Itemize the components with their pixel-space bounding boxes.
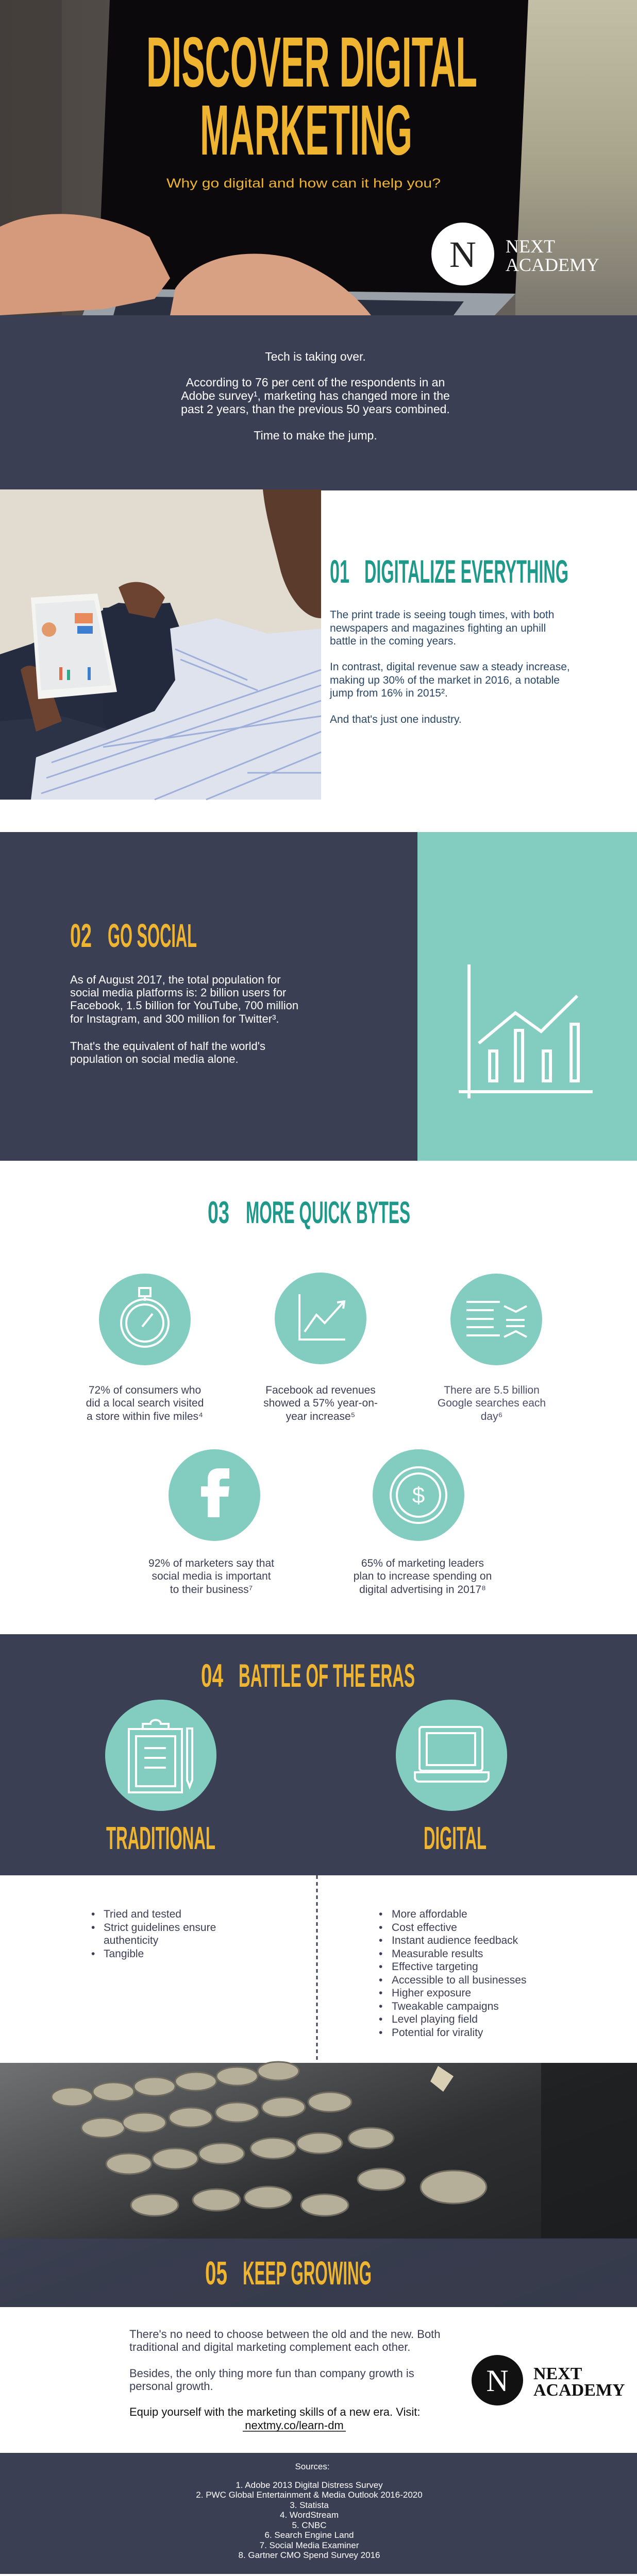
digital bullet list: • bbox=[379, 1908, 382, 1920]
heading 03: 03 bbox=[208, 1195, 229, 1230]
comparison lists bbox=[91, 1875, 526, 2063]
hero: laptop photo header bbox=[0, 0, 637, 315]
stat texts row 2 bbox=[148, 1557, 492, 1596]
traditional bullet list: • bbox=[91, 1908, 95, 1920]
digital bullet list: Effective targeting bbox=[392, 1961, 478, 1973]
stat texts row 1: Google searches each bbox=[438, 1397, 546, 1409]
logo: Next Academy (header): NEXT bbox=[506, 236, 555, 257]
body text 01: newspapers and magazines fighting an uphill bbox=[330, 622, 546, 634]
logo: Next Academy (header): ACADEMY bbox=[506, 255, 599, 275]
intro band: Tech is taking over. bbox=[265, 350, 366, 363]
digital bullet list: Tweakable campaigns bbox=[392, 2001, 499, 2012]
section 03: more quick bytes bbox=[86, 1195, 546, 1596]
digital bullet list: • bbox=[379, 2013, 382, 2025]
heading 05: keep growing: 05 bbox=[205, 2255, 227, 2292]
icon: laptop (digital) bbox=[396, 1700, 507, 1811]
intro band bbox=[0, 315, 637, 490]
heading 03 bbox=[208, 1195, 410, 1230]
body text 01: The print trade is seeing tough times, with both bbox=[330, 609, 554, 621]
digital bullet list: Cost effective bbox=[392, 1922, 457, 1934]
intro band: Adobe survey¹, marketing has changed more in the bbox=[181, 389, 450, 402]
sources footer: 6. Search Engine Land bbox=[265, 2530, 354, 2540]
stat texts row 1: There are 5.5 billion bbox=[444, 1384, 540, 1396]
body text 01 bbox=[329, 609, 570, 725]
stat texts row 2: social media is important bbox=[152, 1570, 271, 1582]
digital bullet list: • bbox=[379, 1935, 382, 1946]
digital bullet list: • bbox=[379, 1974, 382, 1986]
sources footer: Sources: bbox=[295, 2462, 330, 2471]
icon: bar chart with trend line bbox=[459, 964, 593, 1098]
label: digital: DIGITAL bbox=[424, 1821, 487, 1856]
sources footer: 2. PWC Global Entertainment & Media Outlook 2016-2020 bbox=[196, 2490, 423, 2500]
sources footer: 1. Adobe 2013 Digital Distress Survey bbox=[236, 2480, 383, 2490]
digital bullet list: Accessible to all businesses bbox=[392, 1974, 526, 1986]
digital bullet list: • bbox=[379, 1961, 382, 1973]
body text 02: for Instagram, and 300 million for Twitter³. bbox=[70, 1012, 279, 1025]
sources footer: 7. Social Media Examiner bbox=[260, 2540, 359, 2550]
traditional bullet list: Strict guidelines ensure bbox=[104, 1922, 216, 1934]
icon: clipboard (traditional) bbox=[105, 1700, 216, 1811]
section 01: digitalize everything bbox=[329, 554, 570, 725]
traditional bullet list: Tried and tested bbox=[104, 1908, 181, 1920]
digital bullet list: Potential for virality bbox=[392, 2027, 483, 2039]
closing text: nextmy.co/learn-dm bbox=[245, 2419, 344, 2432]
traditional bullet list: authenticity bbox=[104, 1935, 159, 1946]
stat texts row 1: a store within five miles⁴ bbox=[87, 1411, 203, 1422]
digital bullet list: • bbox=[379, 1922, 382, 1934]
sources footer: 5. CNBC bbox=[292, 2520, 327, 2530]
body text 01: jump from 16% in 2015². bbox=[329, 687, 448, 699]
logo: Next Academy (footer): N bbox=[486, 2364, 509, 2398]
intro band: past 2 years, than the previous 50 years combined. bbox=[181, 402, 450, 416]
sources footer: 3. Statista bbox=[290, 2500, 329, 2510]
label: traditional: TRADITIONAL bbox=[106, 1821, 215, 1856]
title: MARKETING bbox=[200, 91, 412, 170]
logo: Next Academy (header) bbox=[431, 223, 599, 285]
logo: Next Academy (footer): NEXT bbox=[533, 2364, 582, 2383]
logo: Next Academy (footer) bbox=[472, 2355, 625, 2405]
stat texts row 2: plan to increase spending on bbox=[354, 1570, 492, 1582]
heading 02 bbox=[70, 917, 197, 954]
traditional bullet list: Tangible bbox=[104, 1948, 144, 1960]
body text 01: In contrast, digital revenue saw a steady increase, bbox=[330, 661, 570, 673]
digital bullet list: • bbox=[379, 1948, 382, 1960]
icon: stopwatch bbox=[99, 1274, 191, 1365]
stat texts row 1: 72% of consumers who bbox=[89, 1384, 201, 1396]
icon: dollar coin: $ bbox=[412, 1483, 425, 1508]
sources footer: 8. Gartner CMO Spend Survey 2016 bbox=[239, 2550, 380, 2560]
closing text: Besides, the only thing more fun than company growth is bbox=[129, 2367, 414, 2380]
closing text: There's no need to choose between the old and the new. Both bbox=[129, 2328, 441, 2341]
icon: facebook bbox=[169, 1449, 260, 1541]
title bbox=[146, 23, 477, 170]
closing text bbox=[129, 2328, 441, 2432]
body text 02: That's the equivalent of half the world's bbox=[70, 1040, 265, 1053]
section 04: battle of the eras: BATTLE OF THE ERAS bbox=[239, 1658, 415, 1694]
stat texts row 1: year increase⁵ bbox=[286, 1411, 355, 1422]
icon: growth chart bbox=[275, 1273, 366, 1364]
digital bullet list: • bbox=[379, 1987, 382, 1999]
heading 04 bbox=[201, 1658, 415, 1694]
stat texts row 1: Facebook ad revenues bbox=[265, 1384, 376, 1396]
subtitle: Why go digital and how can it help you? bbox=[166, 176, 441, 191]
heading 03: MORE QUICK BYTES bbox=[246, 1195, 410, 1230]
section 04: battle of the eras bbox=[0, 1634, 637, 1875]
icon: search results list bbox=[450, 1274, 542, 1365]
body text 02: Facebook, 1.5 billion for YouTube, 700 million bbox=[70, 999, 298, 1012]
stat texts row 1: showed a 57% year-on- bbox=[263, 1397, 378, 1409]
sources footer: 4. WordStream bbox=[280, 2510, 339, 2520]
body text 01: And that's just one industry. bbox=[330, 714, 462, 725]
logo: Next Academy (footer): ACADEMY bbox=[533, 2381, 625, 2400]
heading 01: 01 bbox=[330, 554, 349, 590]
photo: man with tablet bbox=[0, 489, 321, 800]
digital bullet list: More affordable bbox=[392, 1908, 467, 1920]
closing text: personal growth. bbox=[129, 2380, 213, 2393]
digital bullet list: Measurable results bbox=[392, 1948, 483, 1960]
digital bullet list: • bbox=[379, 2027, 382, 2039]
digital bullet list: Level playing field bbox=[392, 2013, 478, 2025]
stat texts row 2: 92% of marketers say that bbox=[148, 1557, 274, 1569]
heading 04: 04 bbox=[201, 1658, 223, 1694]
section 02: go social bbox=[0, 832, 637, 1161]
stat texts row 2: digital advertising in 2017⁸ bbox=[359, 1584, 486, 1596]
digital bullet list: • bbox=[379, 2001, 382, 2012]
body text 02: social media platforms is: 2 billion users for bbox=[70, 986, 286, 999]
body text 02: population on social media alone. bbox=[70, 1053, 239, 1065]
heading 01 bbox=[330, 554, 568, 590]
stat texts row 2: 65% of marketing leaders bbox=[361, 1557, 484, 1569]
body text 01: making up 30% of the market in 2016, a notable bbox=[330, 674, 560, 686]
heading 05: keep growing bbox=[205, 2255, 372, 2292]
traditional bullet list: • bbox=[91, 1948, 95, 1960]
sources footer bbox=[0, 2453, 637, 2574]
stat texts row 1 bbox=[86, 1384, 546, 1422]
stat texts row 1: did a local search visited bbox=[86, 1397, 204, 1409]
digital bullet list bbox=[379, 1908, 526, 2039]
stat texts row 2: to their business⁷ bbox=[170, 1584, 253, 1596]
body text 01: battle in the coming years. bbox=[330, 635, 456, 647]
traditional bullet list bbox=[91, 1908, 216, 1960]
traditional bullet list: • bbox=[91, 1922, 95, 1934]
heading 02: 02 bbox=[70, 917, 92, 954]
photo: typewriter bbox=[0, 2062, 637, 2307]
icon: dollar coin bbox=[373, 1449, 464, 1541]
digital bullet list: Instant audience feedback bbox=[392, 1935, 518, 1946]
intro band: Time to make the jump. bbox=[254, 429, 377, 442]
stat texts row 1: day⁶ bbox=[481, 1411, 502, 1422]
closing text: traditional and digital marketing complement each other. bbox=[129, 2341, 410, 2353]
text: KEEP GROWING bbox=[243, 2255, 372, 2292]
closing text: Equip yourself with the marketing skills of a new era. Visit: bbox=[129, 2405, 421, 2418]
logo: Next Academy (header): N bbox=[449, 234, 476, 275]
section 02: go social: GO SOCIAL bbox=[108, 917, 197, 954]
digital bullet list: Higher exposure bbox=[392, 1987, 471, 1999]
intro band: According to 76 per cent of the respondents in an bbox=[186, 376, 445, 389]
body text 02 bbox=[70, 973, 298, 1065]
body text 02: As of August 2017, the total population for bbox=[70, 973, 281, 986]
